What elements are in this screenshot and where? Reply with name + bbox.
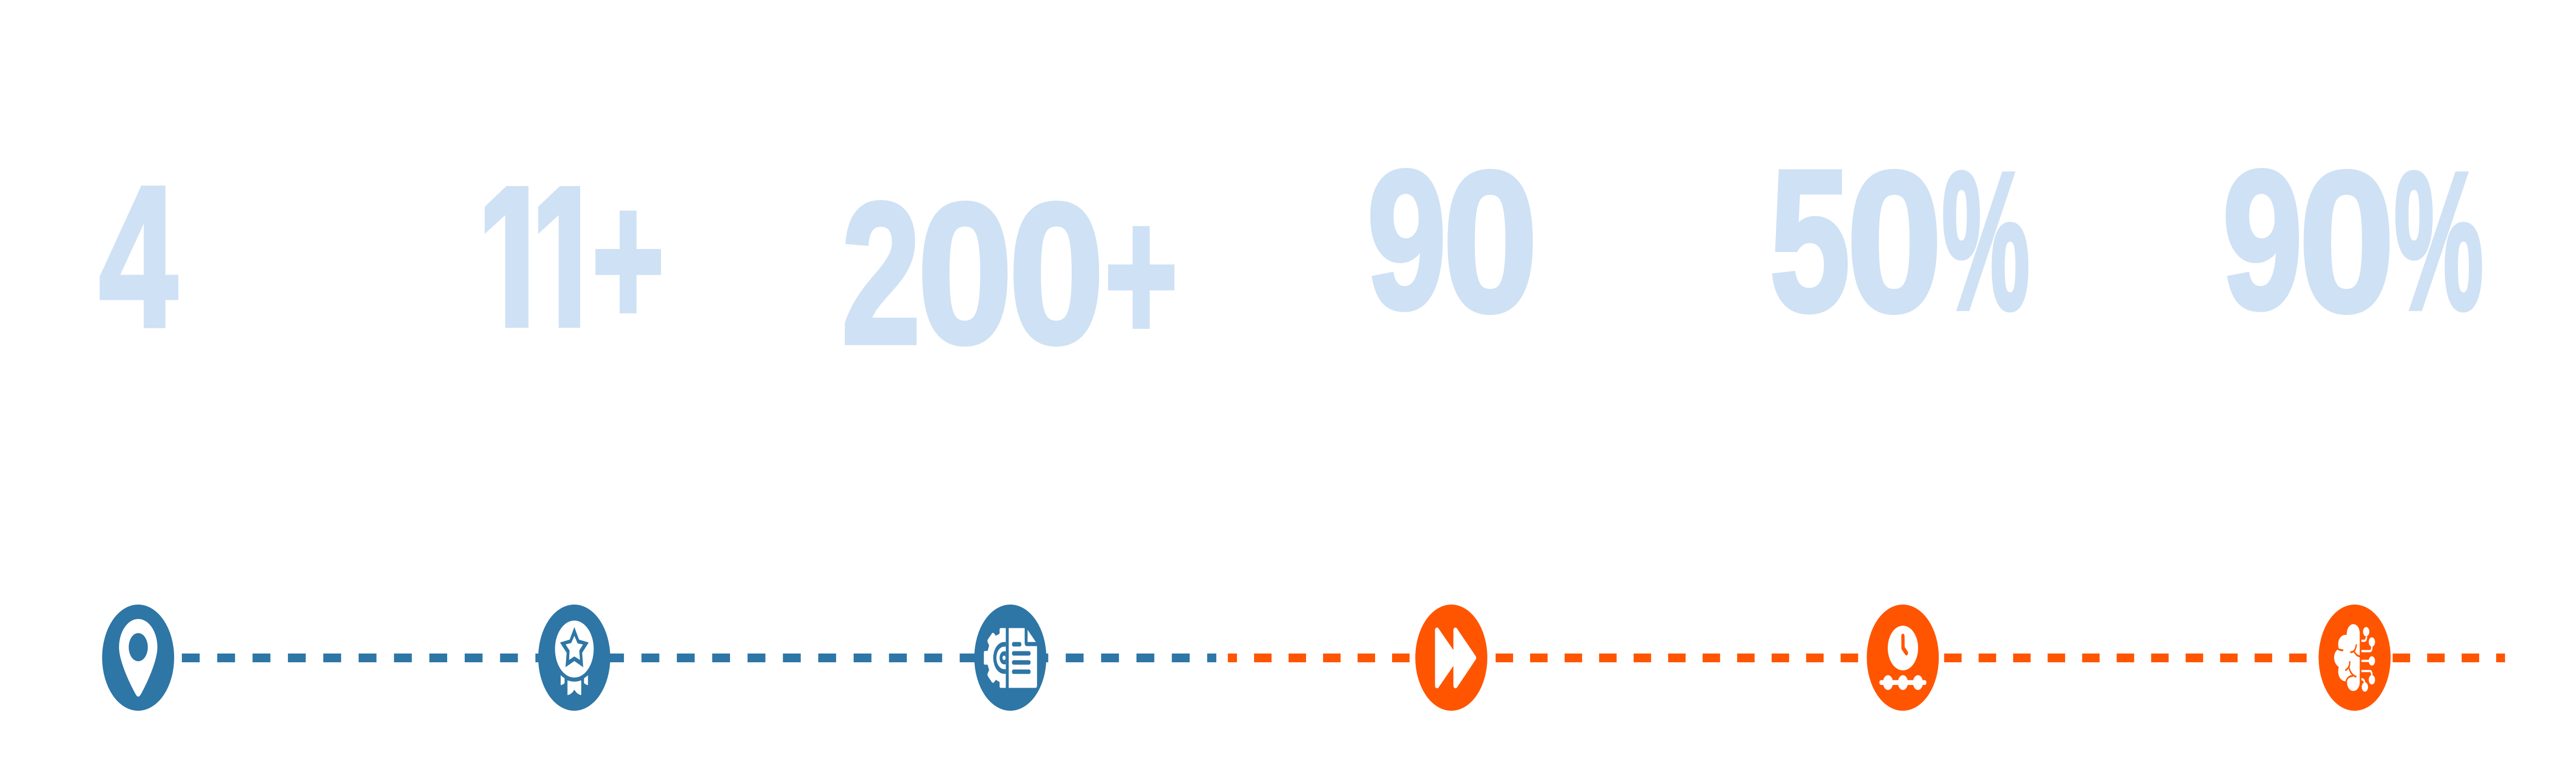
stat: 4: 4 [99,145,178,369]
stat: 200+: + [1105,167,1178,382]
stat: 200+: 0 [918,161,1013,385]
icon: AI brain [2318,605,2391,711]
stat: 11+: 1 [465,132,560,411]
stat: 90%: 9 [2223,129,2302,349]
stat: 200+: 0 [1009,161,1104,385]
stat: 50% [1770,128,2030,354]
icon: gear and document [974,605,1046,711]
stat: 11+: + [592,152,665,367]
stat: 200+: 2 [841,161,921,386]
dashed timeline: orange segment [1228,654,2505,662]
stat: 90% [2223,129,2483,353]
icon: award medal [538,605,610,711]
stat: 200+ [841,161,1178,386]
stat: 90 [1367,129,1538,354]
icon: clock with timeline [1867,605,1939,711]
stat: 90%: % [2394,131,2483,350]
stat: 11+: 1 [519,132,614,411]
stat: 90%: 0 [2299,130,2395,353]
icon: location pin [102,605,174,711]
icon: fast forward [1415,605,1487,711]
stat: 50%: 0 [1846,129,1942,354]
stat: 50%: 5 [1770,128,1850,354]
stat: 11+ [484,186,661,328]
stat: 50%: % [1942,131,2030,350]
stat: 90: 9 [1367,129,1446,349]
dashed timeline: blue segment [182,654,1216,662]
stat: 90: 0 [1443,130,1538,354]
